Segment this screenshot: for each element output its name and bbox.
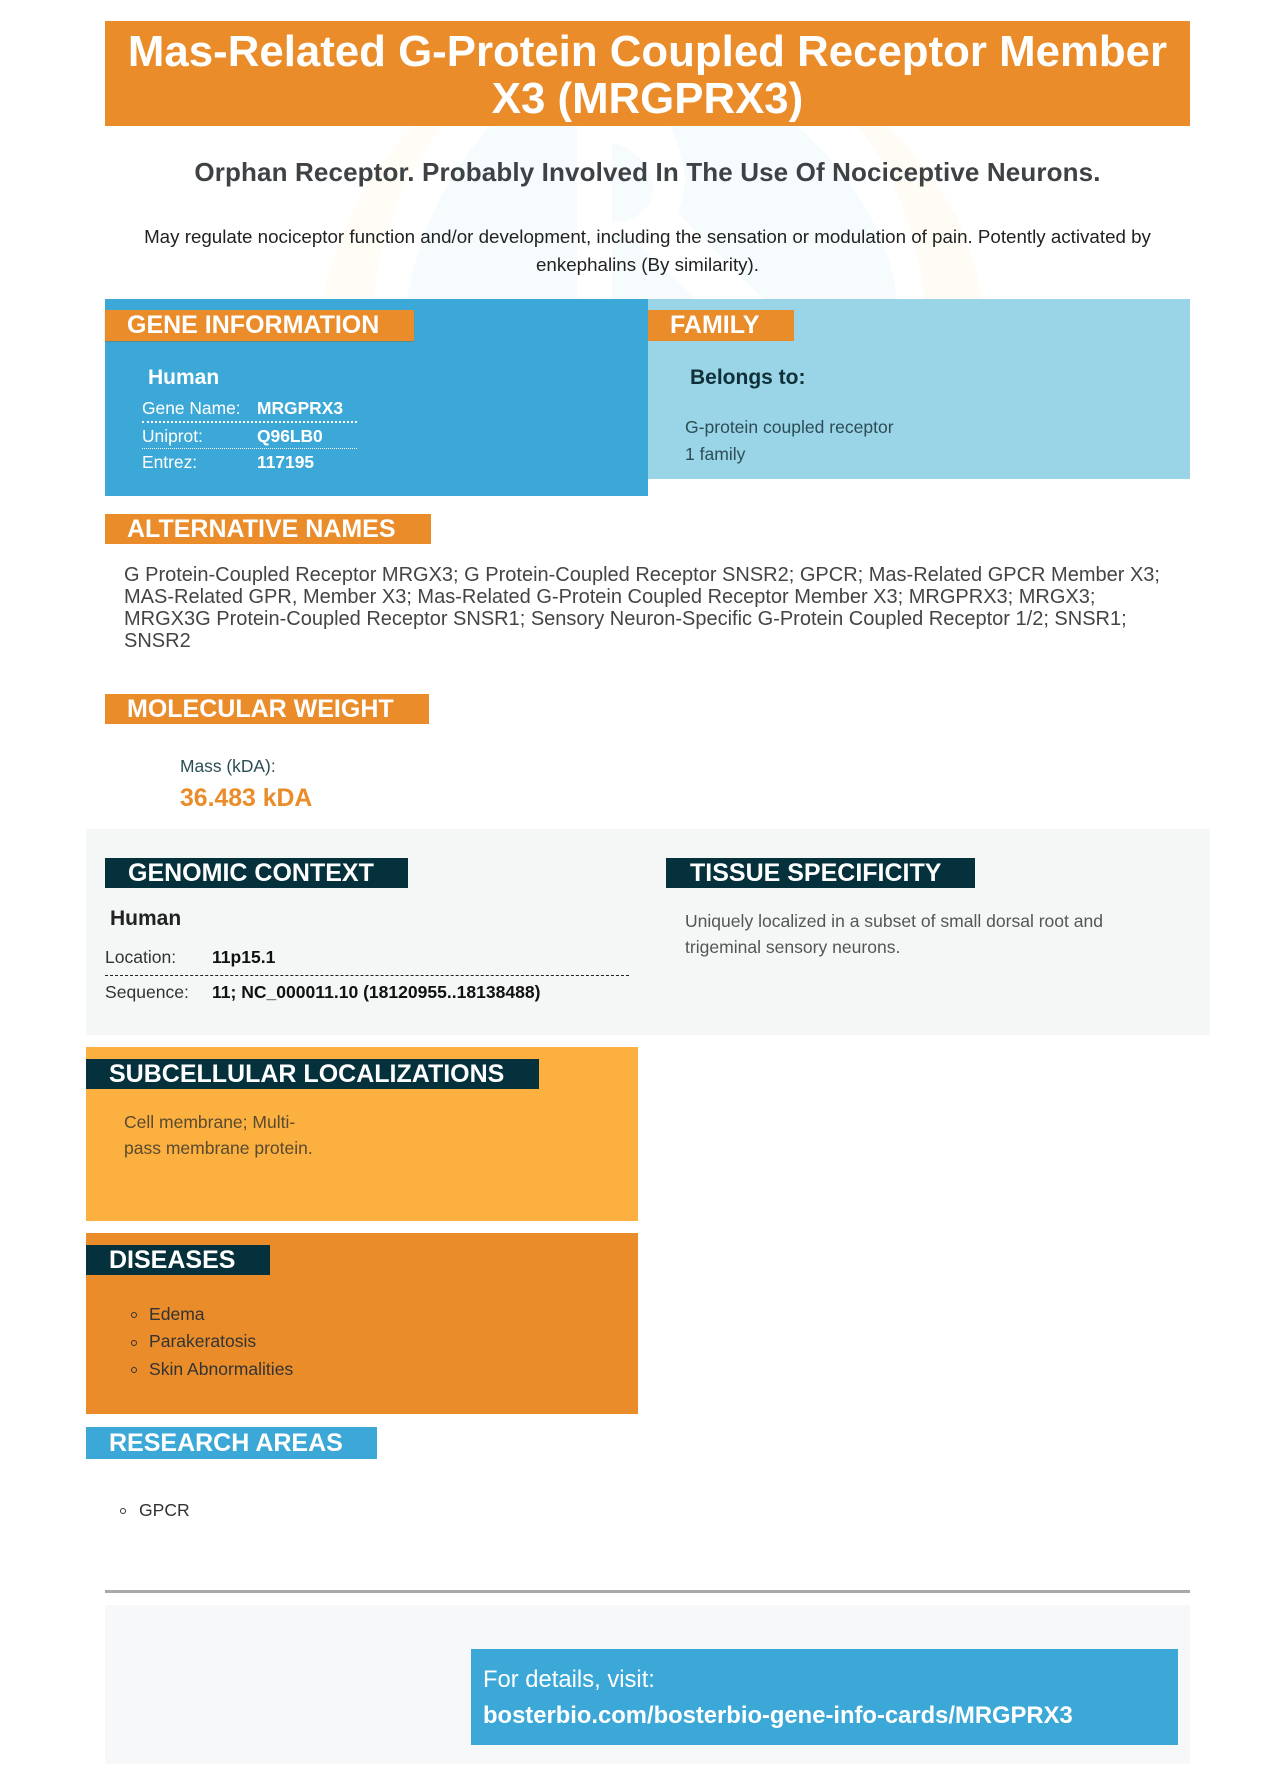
disease list: Skin Abnormalities — [149, 1359, 293, 1379]
heading: tissue specificity: TISSUE SPECIFICITY — [690, 859, 941, 887]
panel: family — [648, 299, 1190, 479]
callout: details link — [471, 1649, 1178, 1745]
heading: molecular weight: MOLECULAR WEIGHT — [127, 695, 394, 723]
alternative names text: G Protein-Coupled Receptor MRGX3; G Protein-Coupled Receptor SNSR2; GPCR; Mas-Related GPCR Member X3; — [124, 564, 1160, 586]
description: May regulate nociceptor function and/or development, including the sensation or modulation of pain. Potently activated by — [144, 226, 1151, 247]
callout label: For details, visit: — [483, 1666, 655, 1693]
panel: footer — [105, 1605, 1190, 1764]
sequence row: Sequence: — [105, 982, 189, 1002]
location row: 11p15.1 — [212, 947, 275, 967]
mass label: Mass (kDA): — [180, 756, 276, 776]
panel: diseases — [86, 1233, 638, 1414]
species label: Human — [110, 907, 181, 930]
disease list — [131, 1304, 293, 1379]
title banner — [105, 21, 1190, 126]
heading: family — [648, 310, 794, 341]
heading: subcellular localizations: SUBCELLULAR LOCALIZATIONS — [109, 1060, 504, 1088]
tissue specificity text: trigeminal sensory neurons. — [685, 937, 900, 957]
family text — [685, 417, 894, 464]
panel: gene information — [105, 299, 648, 496]
subtitle: Orphan Receptor. Probably Involved In The Use Of Nociceptive Neurons. — [194, 157, 1101, 187]
panel: genomic context and tissue specificity — [86, 829, 1210, 1035]
heading: genomic context: GENOMIC CONTEXT — [128, 859, 374, 887]
heading: gene information: GENE INFORMATION — [127, 311, 379, 339]
family text: 1 family — [685, 444, 745, 464]
description — [144, 226, 1151, 275]
gene name row: MRGPRX3 — [257, 398, 343, 418]
heading: research areas: RESEARCH AREAS — [109, 1429, 343, 1457]
entrez row: 117195 — [257, 452, 314, 472]
alternative names text — [124, 564, 1160, 652]
mass value: 36.483 kDA — [180, 785, 312, 812]
alternative names text: MRGX3G Protein-Coupled Receptor SNSR1; Sensory Neuron-Specific G-Protein Coupled Receptor 1/2; SNSR1; — [124, 608, 1127, 630]
watermark logo — [323, 126, 982, 299]
heading: diseases — [86, 1245, 270, 1275]
tissue specificity text: Uniquely localized in a subset of small dorsal root and — [685, 911, 1103, 931]
species label: Human — [148, 366, 219, 389]
uniprot row — [142, 426, 323, 446]
sequence row: 11; NC_000011.10 (18120955..18138488) — [212, 982, 541, 1002]
belongs to label: Belongs to: — [690, 366, 806, 389]
location row — [105, 947, 275, 967]
gene name row: Gene Name: — [142, 398, 241, 418]
alternative names text: SNSR2 — [124, 630, 191, 652]
description: enkephalins (By similarity). — [536, 254, 759, 275]
callout url: bosterbio.com/bosterbio-gene-info-cards/MRGPRX3 — [483, 1702, 1073, 1729]
gene name row — [142, 398, 343, 418]
entrez row — [142, 452, 314, 472]
uniprot row: Uniprot: — [142, 426, 203, 446]
title banner: X3 (MRGPRX3) — [492, 74, 803, 123]
tissue specificity text — [685, 911, 1103, 957]
alternative names text: MAS-Related GPR, Member X3; Mas-Related G-Protein Coupled Receptor Member X3; MRGPRX3; MRGX3; — [124, 586, 1095, 608]
heading: diseases: DISEASES — [109, 1246, 235, 1274]
localization text: pass membrane protein. — [124, 1138, 313, 1158]
uniprot row: Q96LB0 — [257, 426, 323, 446]
title banner: Mas-Related G-Protein Coupled Receptor Member — [128, 27, 1167, 76]
family text: G-protein coupled receptor — [685, 417, 894, 437]
disease list: Parakeratosis — [149, 1331, 256, 1351]
panel: subcellular localizations — [86, 1047, 638, 1221]
disease list: Edema — [149, 1304, 205, 1324]
heading: alternative names: ALTERNATIVE NAMES — [127, 515, 396, 543]
localization text — [124, 1112, 313, 1158]
location row: Location: — [105, 947, 176, 967]
heading: family: FAMILY — [670, 311, 759, 339]
localization text: Cell membrane; Multi- — [124, 1112, 295, 1132]
research areas list: GPCR — [139, 1500, 190, 1520]
entrez row: Entrez: — [142, 452, 197, 472]
